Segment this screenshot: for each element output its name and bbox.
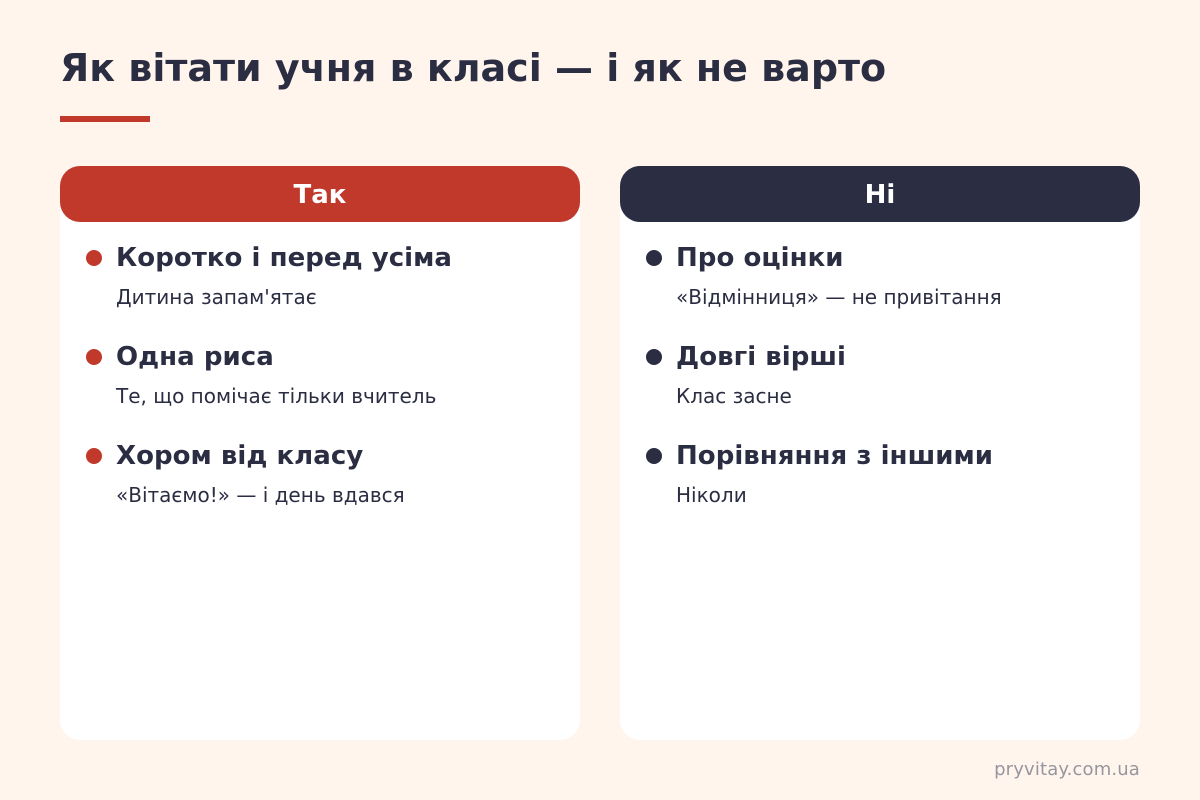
bullet	[86, 250, 102, 266]
item heading: Довгі вірші	[676, 342, 846, 372]
item: Хором від класу	[86, 441, 405, 507]
item heading: Одна риса	[116, 342, 274, 372]
item heading: Порівняння з іншими	[676, 441, 993, 471]
bullet	[646, 250, 662, 266]
title: Як вітати учня в класі — і як не варто	[60, 46, 886, 90]
item text: «Відмінниця» — не привітання	[676, 285, 1002, 309]
bullet	[86, 448, 102, 464]
item text: Дитина запам'ятає	[116, 285, 317, 309]
item text: Клас засне	[676, 384, 792, 408]
item text: «Вітаємо!» — і день вдався	[116, 483, 405, 507]
panel header: Ні	[620, 166, 1140, 222]
panel header: Так	[60, 166, 580, 222]
item: Про оцінки	[646, 243, 1002, 309]
panel: Ні	[620, 166, 1140, 740]
bullet	[646, 448, 662, 464]
title accent bar	[60, 116, 150, 122]
item heading: Коротко і перед усіма	[116, 243, 452, 273]
bullet	[86, 349, 102, 365]
footer source: pryvitay.com.ua	[994, 759, 1140, 780]
item: Одна риса	[86, 342, 436, 408]
item: Порівняння з іншими	[646, 441, 993, 507]
bullet	[646, 349, 662, 365]
panel header: Так: Так	[294, 180, 346, 210]
item: Коротко і перед усіма	[86, 243, 452, 309]
item text: Ніколи	[676, 483, 747, 507]
item: Довгі вірші	[646, 342, 846, 408]
panel header: Ні: Ні	[865, 180, 895, 210]
item heading: Хором від класу	[116, 441, 363, 471]
item text: Те, що помічає тільки вчитель	[116, 384, 436, 408]
item heading: Про оцінки	[676, 243, 844, 273]
panel: Так	[60, 166, 580, 740]
